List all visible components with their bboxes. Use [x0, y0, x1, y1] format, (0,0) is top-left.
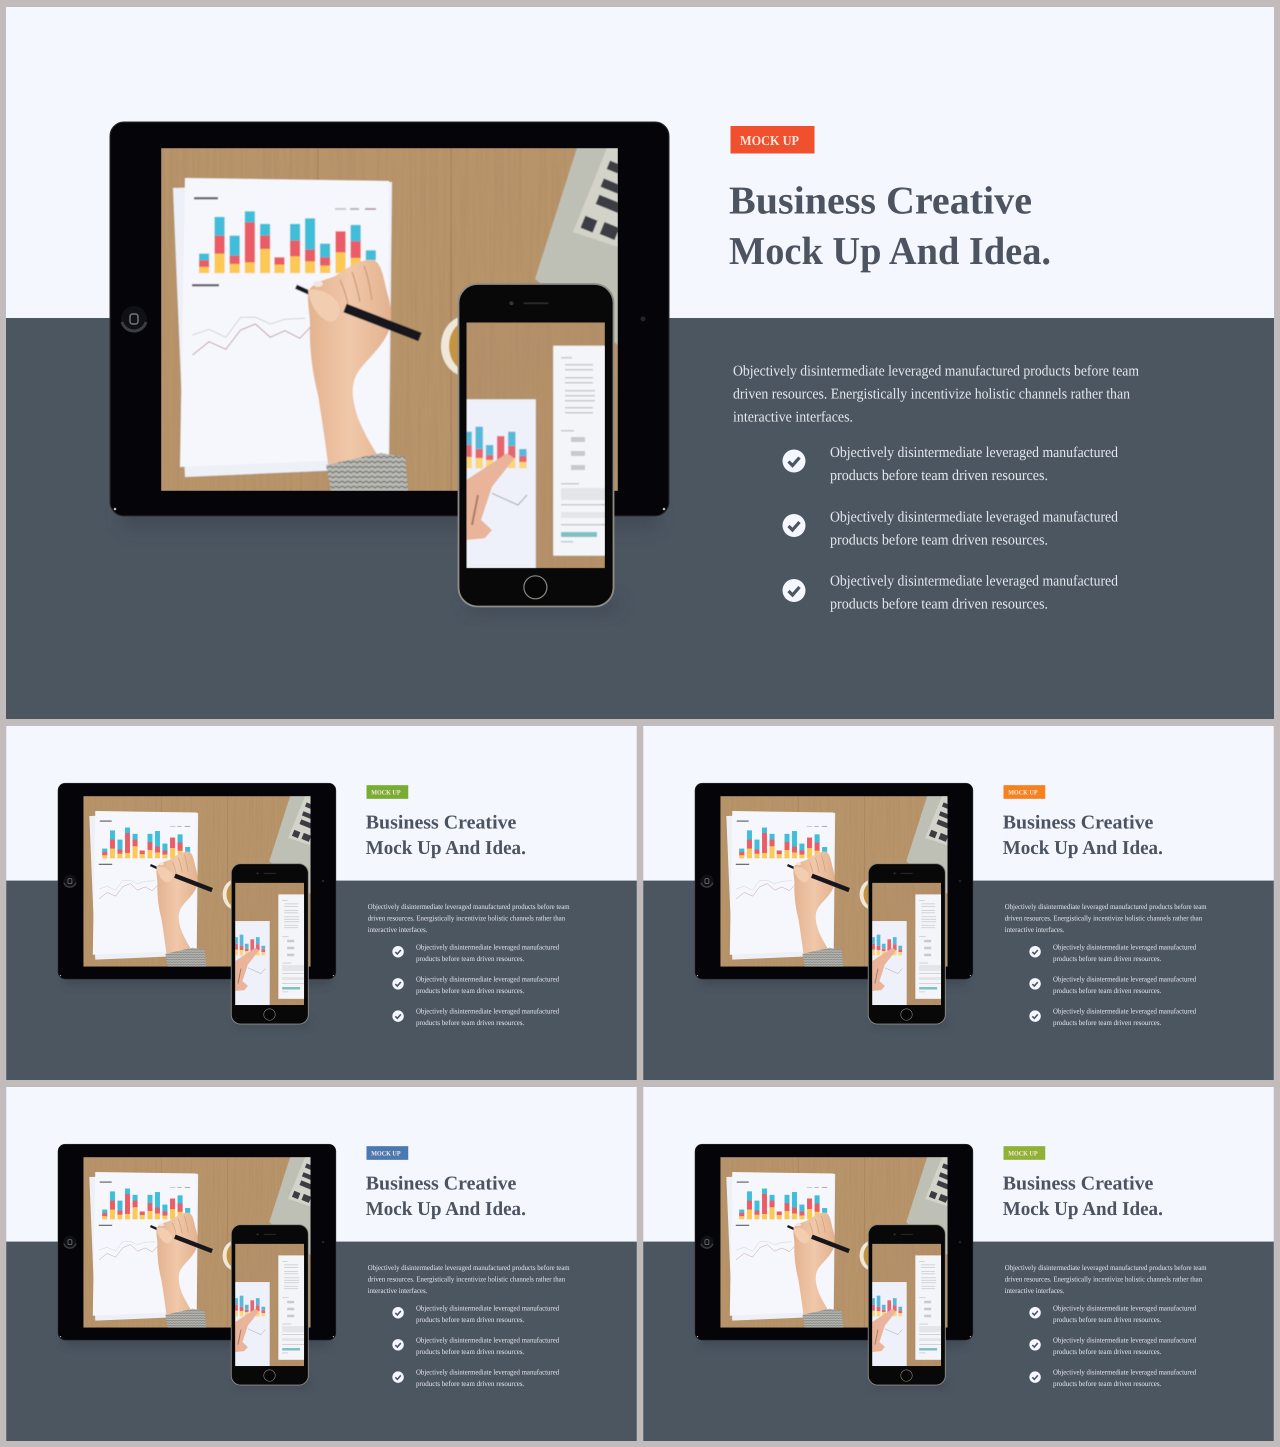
intro paragraph: Objectively disintermediate leveraged manufactured products before team — [368, 1264, 570, 1272]
heading — [366, 1172, 526, 1219]
list item 1: Objectively disintermediate leveraged manufactured — [830, 445, 1118, 461]
badge: mock up — [366, 1146, 408, 1160]
heading: Mock Up And Idea. — [366, 1197, 526, 1219]
checklist: products before team driven resources. — [1053, 1348, 1161, 1356]
intro paragraph: Objectively disintermediate leveraged manufactured products before team — [368, 903, 570, 911]
list item 3: products before team driven resources. — [830, 597, 1048, 613]
checklist: products before team driven resources. — [416, 1348, 524, 1356]
checklist: Objectively disintermediate leveraged manufactured — [1053, 1337, 1196, 1345]
phone pointing hand — [466, 453, 514, 540]
heading: Business Creative — [366, 1172, 516, 1194]
heading — [1003, 811, 1163, 858]
checklist: products before team driven resources. — [416, 1380, 524, 1388]
checklist — [392, 944, 559, 1027]
phone screen photo — [466, 322, 605, 568]
checklist: products before team driven resources. — [416, 987, 524, 995]
line chart — [192, 317, 311, 355]
checklist: Objectively disintermediate leveraged manufactured — [1053, 944, 1196, 952]
badge: mock up: MOCK UP — [1008, 789, 1038, 796]
hand holding pen — [296, 260, 420, 491]
intro paragraph: interactive interfaces. — [1005, 1287, 1064, 1295]
heading — [729, 178, 1051, 273]
slide: small variant orange badge — [643, 726, 1274, 1080]
checklist: Objectively disintermediate leveraged manufactured — [1053, 1369, 1196, 1377]
intro paragraph: interactive interfaces. — [1005, 926, 1064, 934]
intro paragraph: interactive interfaces. — [733, 410, 853, 426]
icon: tablet home button — [121, 306, 147, 332]
list item 1: products before team driven resources. — [830, 468, 1048, 484]
heading: Mock Up And Idea. — [729, 229, 1051, 273]
checklist: Objectively disintermediate leveraged manufactured — [1053, 976, 1196, 984]
phone drop shadow — [468, 598, 618, 612]
intro paragraph — [733, 364, 1139, 426]
heading: Mock Up And Idea. — [1003, 1197, 1163, 1219]
checklist — [782, 445, 1118, 613]
slide: main large mock up — [6, 7, 1274, 719]
tablet drop shadow — [122, 508, 657, 528]
checklist: Objectively disintermediate leveraged manufactured — [416, 944, 559, 952]
intro paragraph: driven resources. Energistically incentivize holistic channels rather than — [368, 1276, 565, 1284]
checklist — [1029, 1305, 1196, 1388]
icon: phone home button — [524, 576, 547, 599]
heading: Business Creative — [1003, 1172, 1153, 1194]
checklist: products before team driven resources. — [1053, 1019, 1161, 1027]
heading — [1003, 1172, 1163, 1219]
badge: mock up — [730, 126, 814, 154]
checklist: Objectively disintermediate leveraged manufactured — [416, 1369, 559, 1377]
stacked bar chart — [199, 212, 376, 273]
checklist: products before team driven resources. — [1053, 955, 1161, 963]
checklist: products before team driven resources. — [1053, 1316, 1161, 1324]
tablet corner highlights — [114, 508, 665, 510]
intro paragraph — [1005, 1264, 1207, 1295]
intro paragraph — [368, 1264, 570, 1295]
list item 1 — [782, 445, 1118, 484]
heading: Mock Up And Idea. — [366, 836, 526, 858]
device mockups — [58, 783, 336, 1027]
report heading marks — [192, 197, 376, 286]
checklist: Objectively disintermediate leveraged manufactured — [416, 1337, 559, 1345]
device mockups — [695, 1144, 973, 1388]
checklist: Objectively disintermediate leveraged manufactured — [1053, 1008, 1196, 1016]
intro paragraph: driven resources. Energistically incentivize holistic channels rather than — [368, 915, 565, 923]
list item 2: products before team driven resources. — [830, 532, 1048, 548]
intro paragraph — [1005, 903, 1207, 934]
badge: mock up: MOCK UP — [371, 1150, 401, 1157]
front paper sheet — [180, 178, 389, 467]
phone right paper text lines — [561, 357, 605, 542]
heading: Business Creative — [729, 178, 1032, 222]
intro paragraph: Objectively disintermediate leveraged manufactured products before team — [1005, 903, 1207, 911]
slide: small variant olive badge — [643, 1087, 1274, 1441]
intro paragraph: driven resources. Energistically incentivize holistic channels rather than — [1005, 1276, 1202, 1284]
heading: Business Creative — [366, 811, 516, 833]
knit sleeve — [326, 453, 408, 491]
coffee cup — [441, 316, 491, 376]
slide: small variant green badge — [6, 726, 637, 1080]
badge: mock up — [1003, 785, 1045, 799]
phone right paper — [553, 346, 605, 556]
badge: mock up: MOCK UP — [371, 789, 401, 796]
intro paragraph: interactive interfaces. — [368, 926, 427, 934]
heading — [366, 811, 526, 858]
badge: mock up — [366, 785, 408, 799]
phone device — [458, 284, 614, 606]
tablet device — [110, 122, 669, 516]
intro paragraph: Objectively disintermediate leveraged manufactured products before team — [1005, 1264, 1207, 1272]
device mockups — [695, 783, 973, 1027]
checklist: products before team driven resources. — [416, 955, 524, 963]
badge: mock up: MOCK UP — [740, 133, 799, 148]
checklist — [392, 1305, 559, 1388]
phone line chart — [492, 493, 527, 505]
intro paragraph: Objectively disintermediate leveraged manufactured products before team — [733, 364, 1139, 380]
slide background — [6, 7, 1274, 719]
back paper sheet — [173, 182, 392, 477]
icon: tablet camera — [640, 316, 646, 322]
checklist: Objectively disintermediate leveraged manufactured — [416, 976, 559, 984]
device mockups — [58, 1144, 336, 1388]
tablet screen photo — [161, 148, 623, 491]
checklist — [1029, 944, 1196, 1027]
badge: mock up — [1003, 1146, 1045, 1160]
list item 2 — [782, 509, 1118, 548]
heading: Mock Up And Idea. — [1003, 836, 1163, 858]
phone bar chart — [466, 427, 527, 468]
checklist: products before team driven resources. — [416, 1316, 524, 1324]
laptop — [535, 148, 623, 345]
list item 2: Objectively disintermediate leveraged manufactured — [830, 509, 1118, 525]
checklist: products before team driven resources. — [1053, 1380, 1161, 1388]
checklist: Objectively disintermediate leveraged manufactured — [416, 1008, 559, 1016]
intro paragraph — [368, 903, 570, 934]
checklist: Objectively disintermediate leveraged manufactured — [416, 1305, 559, 1313]
intro paragraph: interactive interfaces. — [368, 1287, 427, 1295]
heading: Business Creative — [1003, 811, 1153, 833]
checklist: products before team driven resources. — [416, 1019, 524, 1027]
slide: small variant blue badge — [6, 1087, 637, 1441]
phone speaker and camera — [509, 301, 548, 305]
device mockups — [110, 122, 669, 612]
list item 3: Objectively disintermediate leveraged manufactured — [830, 574, 1118, 590]
checklist: Objectively disintermediate leveraged manufactured — [1053, 1305, 1196, 1313]
badge: mock up: MOCK UP — [1008, 1150, 1038, 1157]
intro paragraph: driven resources. Energistically incentivize holistic channels rather than — [733, 386, 1130, 402]
intro paragraph: driven resources. Energistically incentivize holistic channels rather than — [1005, 915, 1202, 923]
phone left paper — [466, 399, 536, 568]
list item 3 — [782, 574, 1118, 613]
checklist: products before team driven resources. — [1053, 987, 1161, 995]
